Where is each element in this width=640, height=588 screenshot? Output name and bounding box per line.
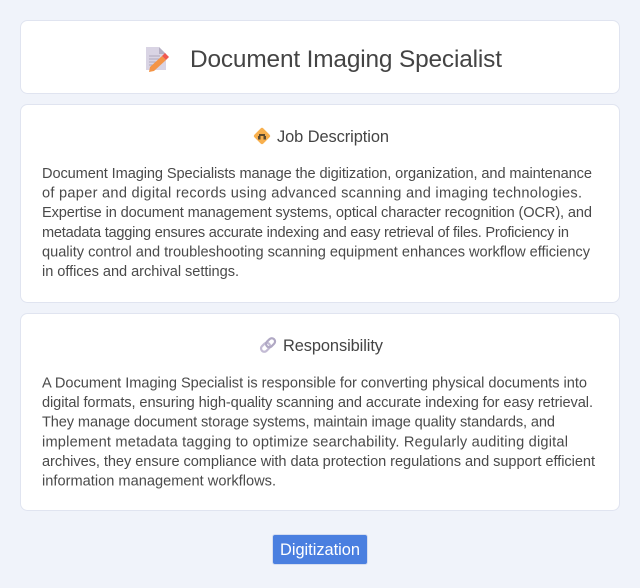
text block: job description: of paper and digital records using advanced scanning and imaging technologies.: [42, 186, 582, 202]
tag button: digitization: Digitization: [280, 541, 360, 559]
text block: job description: [42, 166, 592, 280]
text block: responsibility: digital formats, ensuring high-quality scanning and accurate indexing for easy retrieval.: [42, 395, 593, 411]
heading: job description: Job Description: [277, 128, 389, 146]
text block: responsibility: A Document Imaging Specialist is responsible for converting physical documents into: [42, 376, 587, 392]
panel: job description: [20, 104, 620, 302]
icon: construction diamond: [253, 127, 271, 145]
title: Document Imaging Specialist: [190, 46, 502, 73]
text block: job description: Document Imaging Specialists manage the digitization, organization, and maintenance: [42, 166, 592, 182]
heading: responsibility: Responsibility: [283, 337, 384, 355]
panel: responsibility: [20, 314, 620, 510]
text block: job description: quality control and troubleshooting scanning equipment enhances workflow efficiency: [42, 244, 591, 260]
panel: title card: [20, 20, 620, 94]
text block: responsibility: implement metadata tagging to optimize searchability. Regularly auditing digital: [42, 434, 568, 450]
tag button: digitization: [272, 534, 368, 564]
text block: responsibility: information management workflows.: [42, 474, 276, 490]
text block: responsibility: They manage document storage systems, maintain image quality standards, and: [42, 415, 555, 431]
text block: responsibility: [42, 376, 595, 490]
text block: responsibility: archives, they ensure compliance with data protection regulations and support efficient: [42, 454, 595, 470]
icon: chain link: [260, 337, 276, 353]
text block: job description: Expertise in document management systems, optical character recognition (OCR), and: [42, 205, 592, 221]
text block: job description: metadata tagging ensures accurate indexing and easy retrieval of files. Proficiency in: [42, 225, 569, 241]
text block: job description: in offices and archival settings.: [42, 264, 239, 280]
icon: document with pencil: [146, 47, 169, 72]
